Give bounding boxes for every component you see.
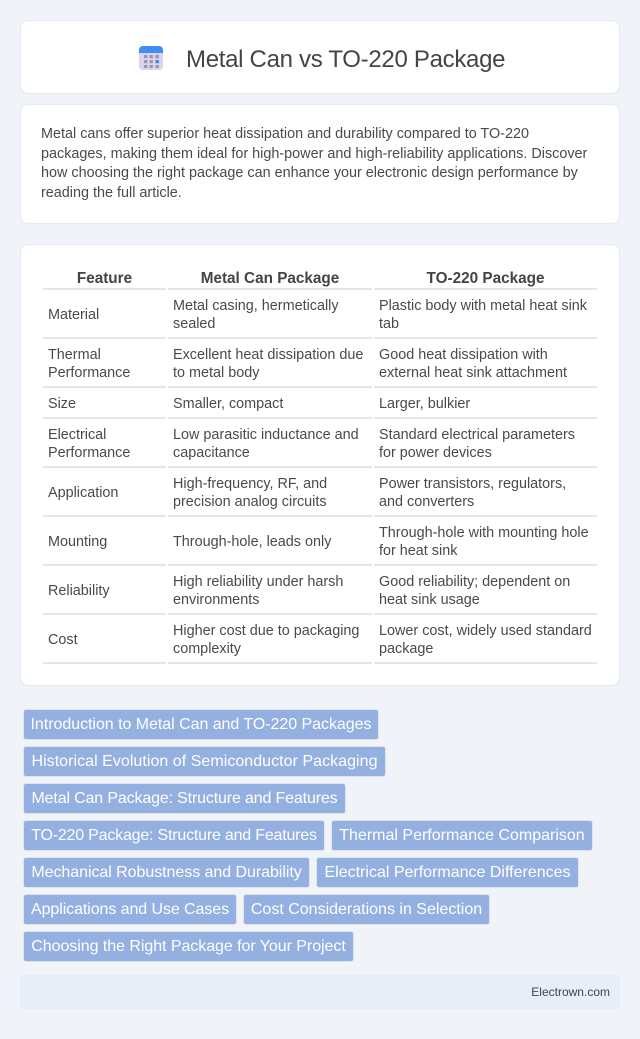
thermal: metal can: Excellent heat dissipation due — [173, 347, 363, 363]
size: metal can: Smaller, compact — [173, 396, 283, 412]
application: metal can: precision analog circuits — [173, 494, 327, 510]
intro text: reading the full article. — [41, 184, 182, 200]
tag: introduction — [23, 709, 379, 740]
thermal: metal can — [173, 347, 363, 381]
material: to-220: tab — [379, 316, 399, 332]
tag: historical evolution: Historical Evolution of Semiconductor Packaging — [31, 753, 378, 770]
row: mounting: Mounting — [48, 534, 107, 550]
tag: to-220 structure: TO-220 Package: Structure and Features — [31, 827, 317, 844]
comparison table panel — [20, 244, 620, 686]
intro text: Metal cans offer superior heat dissipation and durability compared to TO-220 — [41, 126, 529, 142]
intro text: packages, making them ideal for high-power and high-reliability applications. Discover — [41, 146, 587, 162]
electrical: to-220: Standard electrical parameters — [379, 427, 575, 443]
table header: to-220: TO-220 Package — [427, 270, 544, 287]
row: thermal performance — [48, 347, 130, 381]
row: thermal performance: Performance — [48, 365, 130, 381]
application: to-220: and converters — [379, 494, 474, 510]
reliability: metal can: environments — [173, 592, 259, 608]
row: thermal performance: Thermal — [48, 347, 101, 363]
electrical: metal can: capacitance — [173, 445, 250, 461]
tag: cost considerations: Cost Considerations in Selection — [251, 901, 482, 918]
mounting: to-220 — [379, 525, 589, 559]
tag: metal can structure: Metal Can Package: Structure and Features — [31, 790, 338, 807]
tag: thermal comparison — [331, 820, 593, 851]
electrical: metal can — [173, 427, 359, 461]
footer bar — [20, 975, 620, 1009]
row: material: Material — [48, 307, 99, 323]
mounting: metal can: Through-hole, leads only — [173, 534, 331, 550]
header card — [20, 20, 620, 94]
tag: choosing: Choosing the Right Package for Your Project — [31, 938, 346, 955]
tag: metal can structure — [23, 783, 346, 814]
row: reliability: Reliability — [48, 583, 110, 599]
mounting: to-220: Through-hole with mounting hole — [379, 525, 589, 541]
cost: metal can: complexity — [173, 641, 241, 657]
cost: to-220 — [379, 623, 592, 657]
reliability: metal can — [173, 574, 343, 608]
intro text: how choosing the right package can enhance your electronic design performance by — [41, 165, 578, 181]
thermal: to-220 — [379, 347, 567, 381]
row: size: Size — [48, 396, 76, 412]
mounting: to-220: for heat sink — [379, 543, 457, 559]
row: electrical performance: Performance — [48, 445, 130, 461]
thermal: metal can: to metal body — [173, 365, 259, 381]
row: electrical performance: Electrical — [48, 427, 106, 443]
cost: to-220: package — [379, 641, 433, 657]
intro text — [41, 126, 588, 200]
electrical: metal can: Low parasitic inductance and — [173, 427, 359, 443]
cost: metal can: Higher cost due to packaging — [173, 623, 359, 639]
row: electrical performance — [48, 427, 130, 461]
thermal: to-220: external heat sink attachment — [379, 365, 567, 381]
tag: mechanical robustness — [23, 857, 310, 888]
material: metal can — [173, 298, 339, 332]
reliability: to-220: heat sink usage — [379, 592, 480, 608]
electrical: to-220: for power devices — [379, 445, 492, 461]
electrical: to-220 — [379, 427, 575, 461]
tag: historical evolution — [23, 746, 386, 777]
tag: to-220 structure — [23, 820, 325, 851]
tag: choosing — [23, 931, 354, 962]
material: metal can: sealed — [173, 316, 215, 332]
tag: applications: Applications and Use Cases — [31, 901, 229, 918]
application: to-220 — [379, 476, 566, 510]
application: to-220: Power transistors, regulators, — [379, 476, 566, 492]
row: application: Application — [48, 485, 118, 501]
tag: cost considerations — [243, 894, 490, 925]
application: metal can: High-frequency, RF, and — [173, 476, 327, 492]
application: metal can — [173, 476, 327, 510]
title: Metal Can vs TO-220 Package — [186, 46, 505, 73]
tag: applications — [23, 894, 237, 925]
intro panel — [20, 104, 620, 224]
table header: metal can: Metal Can Package — [201, 270, 339, 287]
tag: mechanical robustness: Mechanical Robustness and Durability — [31, 864, 302, 881]
reliability: metal can: High reliability under harsh — [173, 574, 343, 590]
reliability: to-220 — [379, 574, 570, 608]
material: to-220 — [379, 298, 587, 332]
row: cost: Cost — [48, 632, 78, 648]
material: to-220: Plastic body with metal heat sink — [379, 298, 587, 314]
tag: introduction: Introduction to Metal Can and TO-220 Packages — [31, 716, 371, 733]
material: metal can: Metal casing, hermetically — [173, 298, 339, 314]
tag: electrical differences: Electrical Performance Differences — [324, 864, 571, 881]
icon: calendar grid — [139, 46, 163, 70]
tag: thermal comparison: Thermal Performance Comparison — [339, 827, 585, 844]
tag: electrical differences — [316, 857, 579, 888]
size: to-220: Larger, bulkier — [379, 396, 470, 412]
table header: feature: Feature — [77, 270, 132, 287]
footer text: Electrown.com — [531, 985, 610, 999]
thermal: to-220: Good heat dissipation with — [379, 347, 548, 363]
reliability: to-220: Good reliability; dependent on — [379, 574, 570, 590]
cost: to-220: Lower cost, widely used standard — [379, 623, 592, 639]
cost: metal can — [173, 623, 359, 657]
